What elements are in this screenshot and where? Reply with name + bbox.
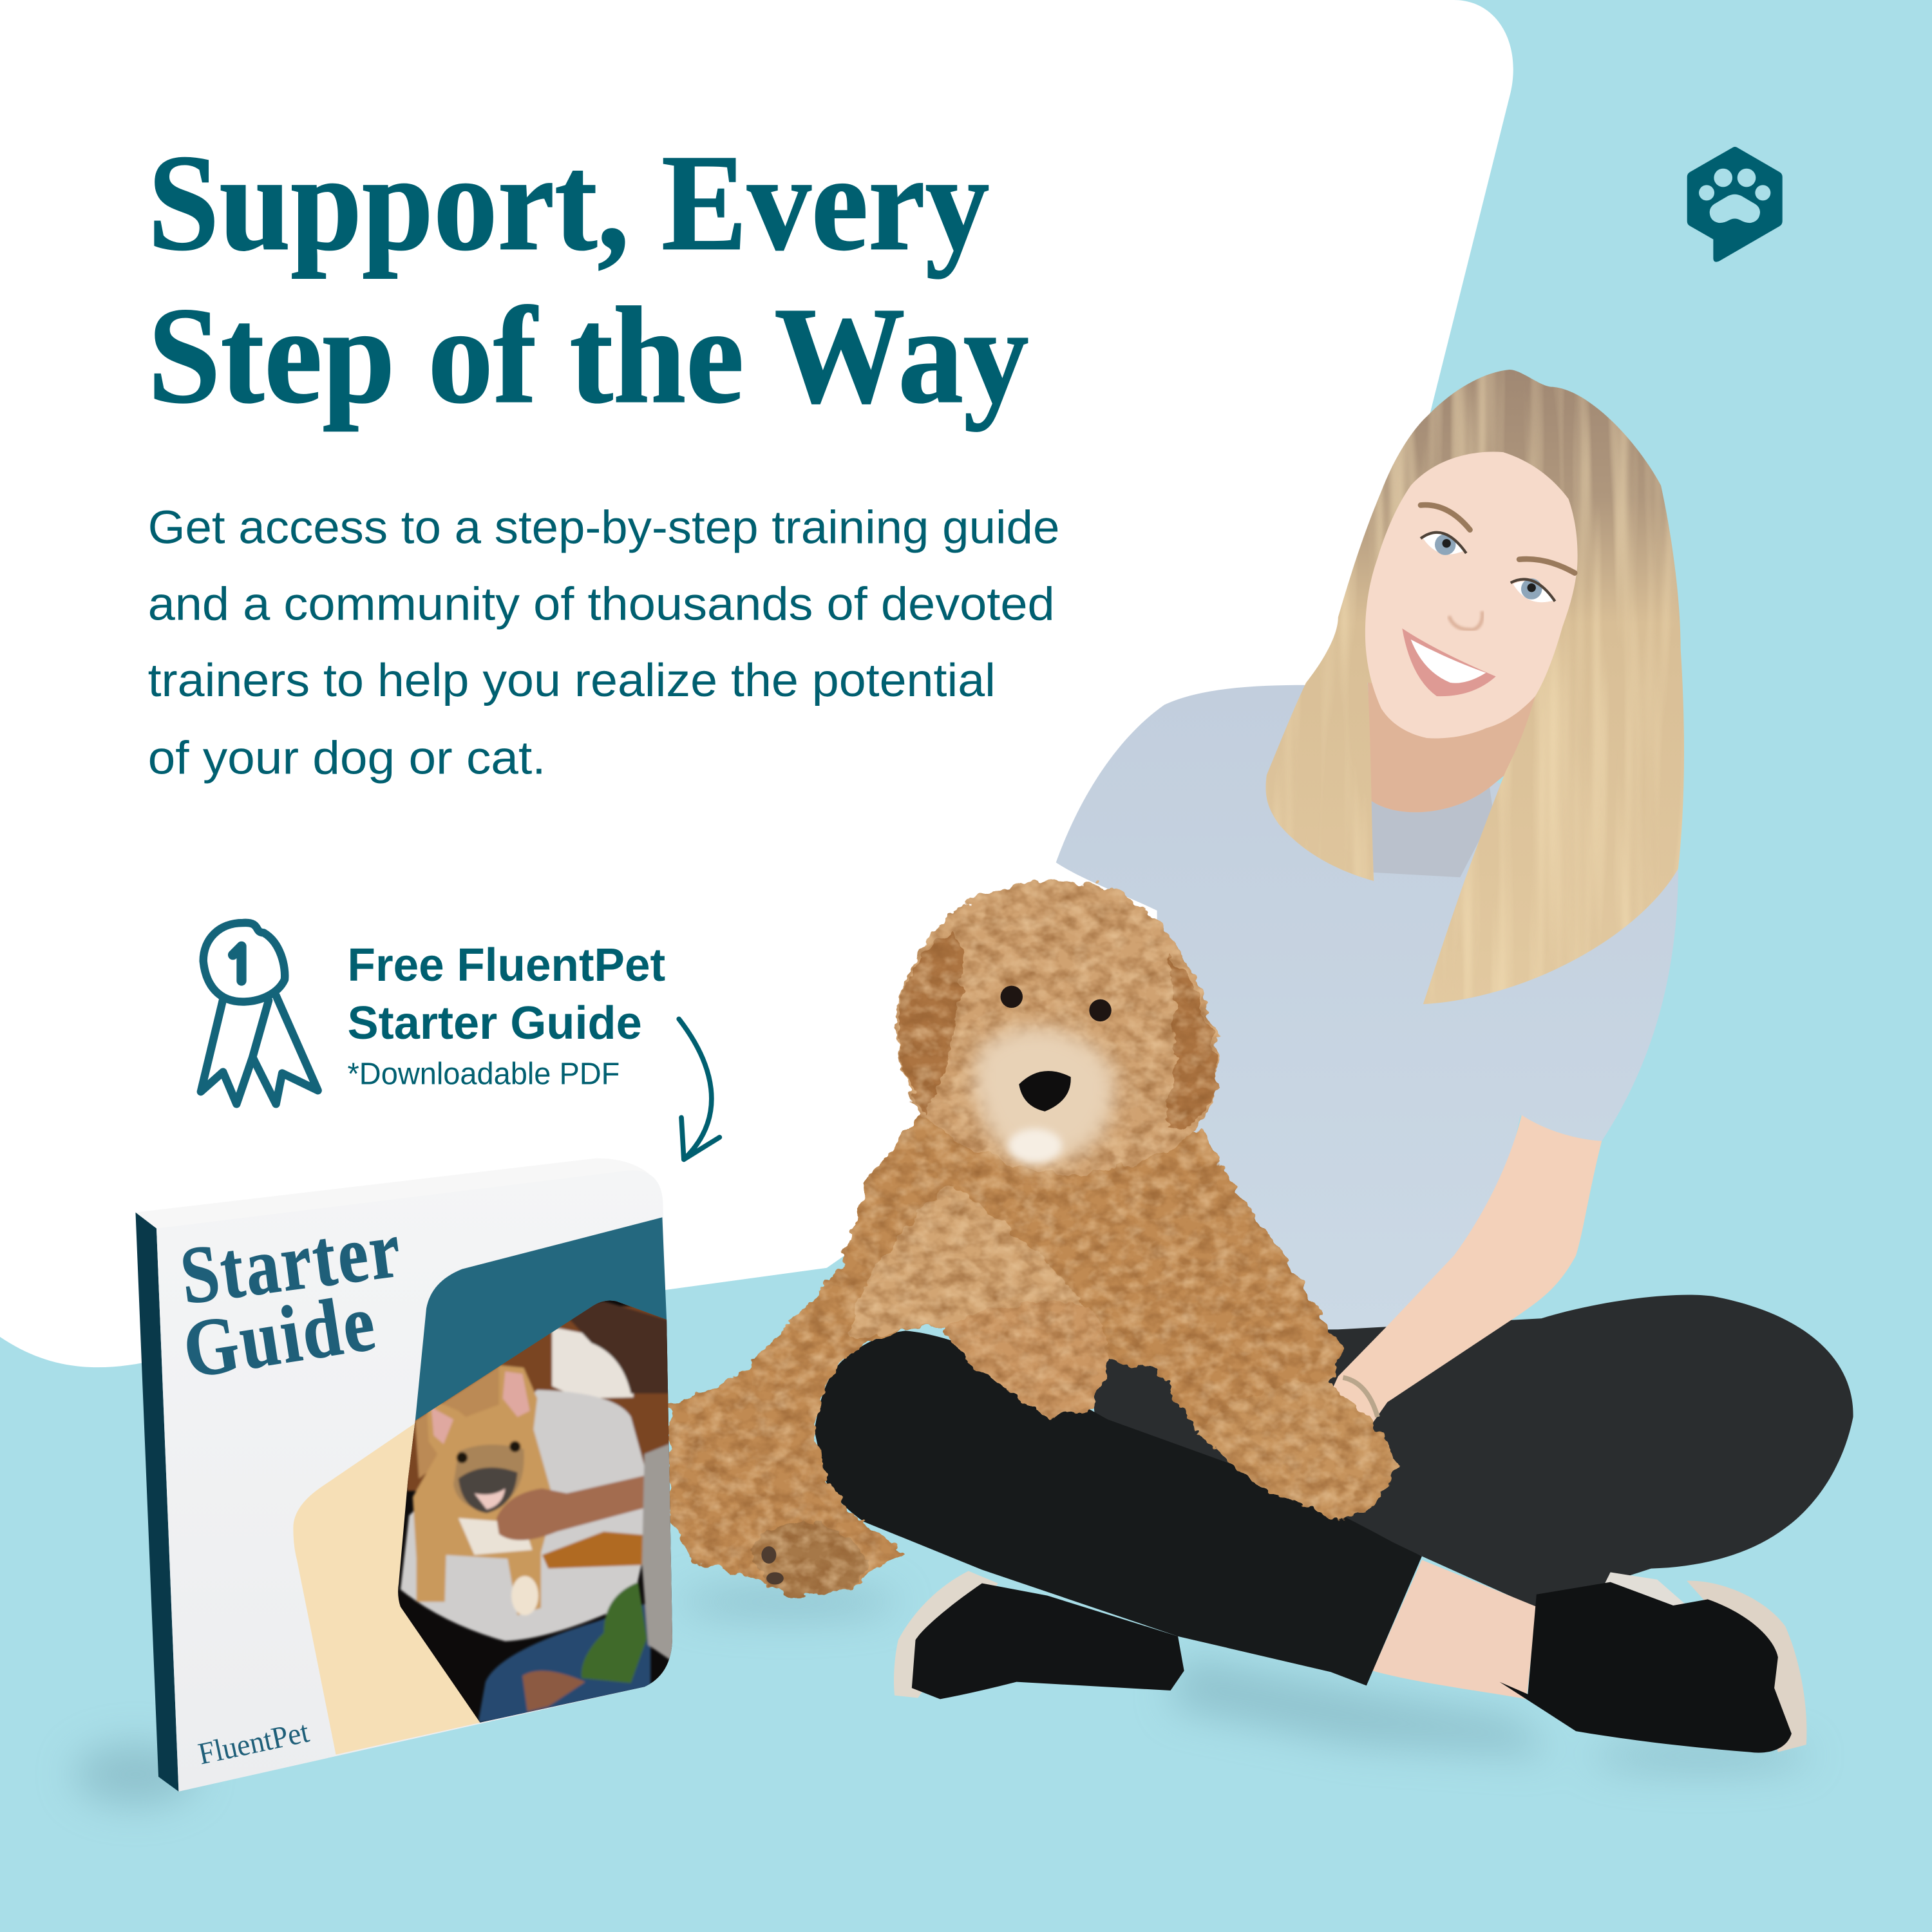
book photo: rope (582, 1582, 647, 1683)
book photo: chair arm (542, 1531, 647, 1569)
book photo: cushion (401, 1390, 653, 1641)
dog: head (896, 881, 1218, 1173)
woman: collar (1371, 788, 1493, 877)
woman: face (1365, 452, 1578, 739)
callout: free starter guide: Free FluentPet (348, 939, 665, 991)
floor shadows (74, 1587, 1812, 1805)
icon: first-place ribbon (201, 923, 318, 1104)
book photo: dog (413, 1365, 554, 1615)
callout: free starter guide: Starter Guide (348, 997, 642, 1049)
body text (148, 502, 1059, 784)
book photo: person (570, 1301, 668, 1395)
woman: front leg (815, 1331, 1422, 1685)
woman: right shoe (1499, 1572, 1806, 1753)
dog: chin (1008, 1129, 1062, 1163)
book: photo (394, 1294, 677, 1725)
dog: eyes (1001, 986, 1112, 1021)
woman: left shoe (894, 1571, 1184, 1699)
book photo: arm and hand (497, 1473, 653, 1540)
book: logo text: FluentPet (195, 1714, 312, 1772)
book: title: Starter (176, 1204, 407, 1321)
woman: neck (1368, 677, 1542, 812)
white blob panel (0, 0, 1513, 1367)
book: top edge (135, 1158, 663, 1229)
woman: ankle (1372, 1560, 1537, 1699)
body text: and a community of thousands of devoted (148, 578, 1055, 630)
dog: muzzle (972, 1027, 1116, 1164)
book: cover (156, 1170, 672, 1792)
book: spine (135, 1213, 178, 1792)
woman: nose shading (1449, 611, 1482, 630)
book: title (176, 1204, 407, 1396)
dog: right paw (1197, 1381, 1399, 1519)
woman: bracelet (1343, 1378, 1378, 1417)
icon: paw speech-bubble logo (1687, 147, 1783, 262)
book photo: vase (552, 1327, 633, 1399)
book photo: hand (522, 1671, 585, 1712)
book: cream shape (293, 1423, 480, 1754)
body text: Get access to a step-by-step training guide (148, 502, 1059, 554)
callout: free starter guide: *Downloadable PDF (348, 1057, 620, 1092)
body text: trainers to help you realize the potential (148, 654, 996, 706)
woman (815, 370, 1853, 1753)
dog: back paw (752, 1520, 869, 1596)
title (148, 126, 1029, 432)
book: teal shape (415, 1217, 667, 1421)
arrow (679, 1019, 719, 1159)
book photo: shirt (642, 1442, 675, 1663)
body text: of your dog or cat. (148, 732, 546, 784)
title: Step of the Way (148, 279, 1029, 432)
dog: ears (898, 931, 1217, 1129)
woman: t-shirt (1056, 685, 1678, 1329)
dog: left paw (945, 1301, 1108, 1418)
dog: paw pads (761, 1546, 784, 1584)
woman: arm (1320, 1115, 1602, 1423)
book: title: Guide (178, 1276, 383, 1396)
dog: body (669, 1113, 1399, 1596)
book photo: chair back (415, 1367, 500, 1479)
title: Support, Every (148, 126, 989, 279)
woman: right leg (1084, 1295, 1853, 1607)
book photo: jeans (478, 1602, 650, 1723)
book: starter guide (135, 1158, 677, 1792)
dog (669, 881, 1399, 1596)
woman: smile (1402, 629, 1496, 696)
callout: free starter guide (348, 939, 665, 1092)
woman: hair (1266, 370, 1684, 1004)
woman: eyes (1421, 505, 1575, 602)
dog: chest highlight (850, 1183, 1108, 1418)
dog: nose (1019, 1071, 1071, 1112)
